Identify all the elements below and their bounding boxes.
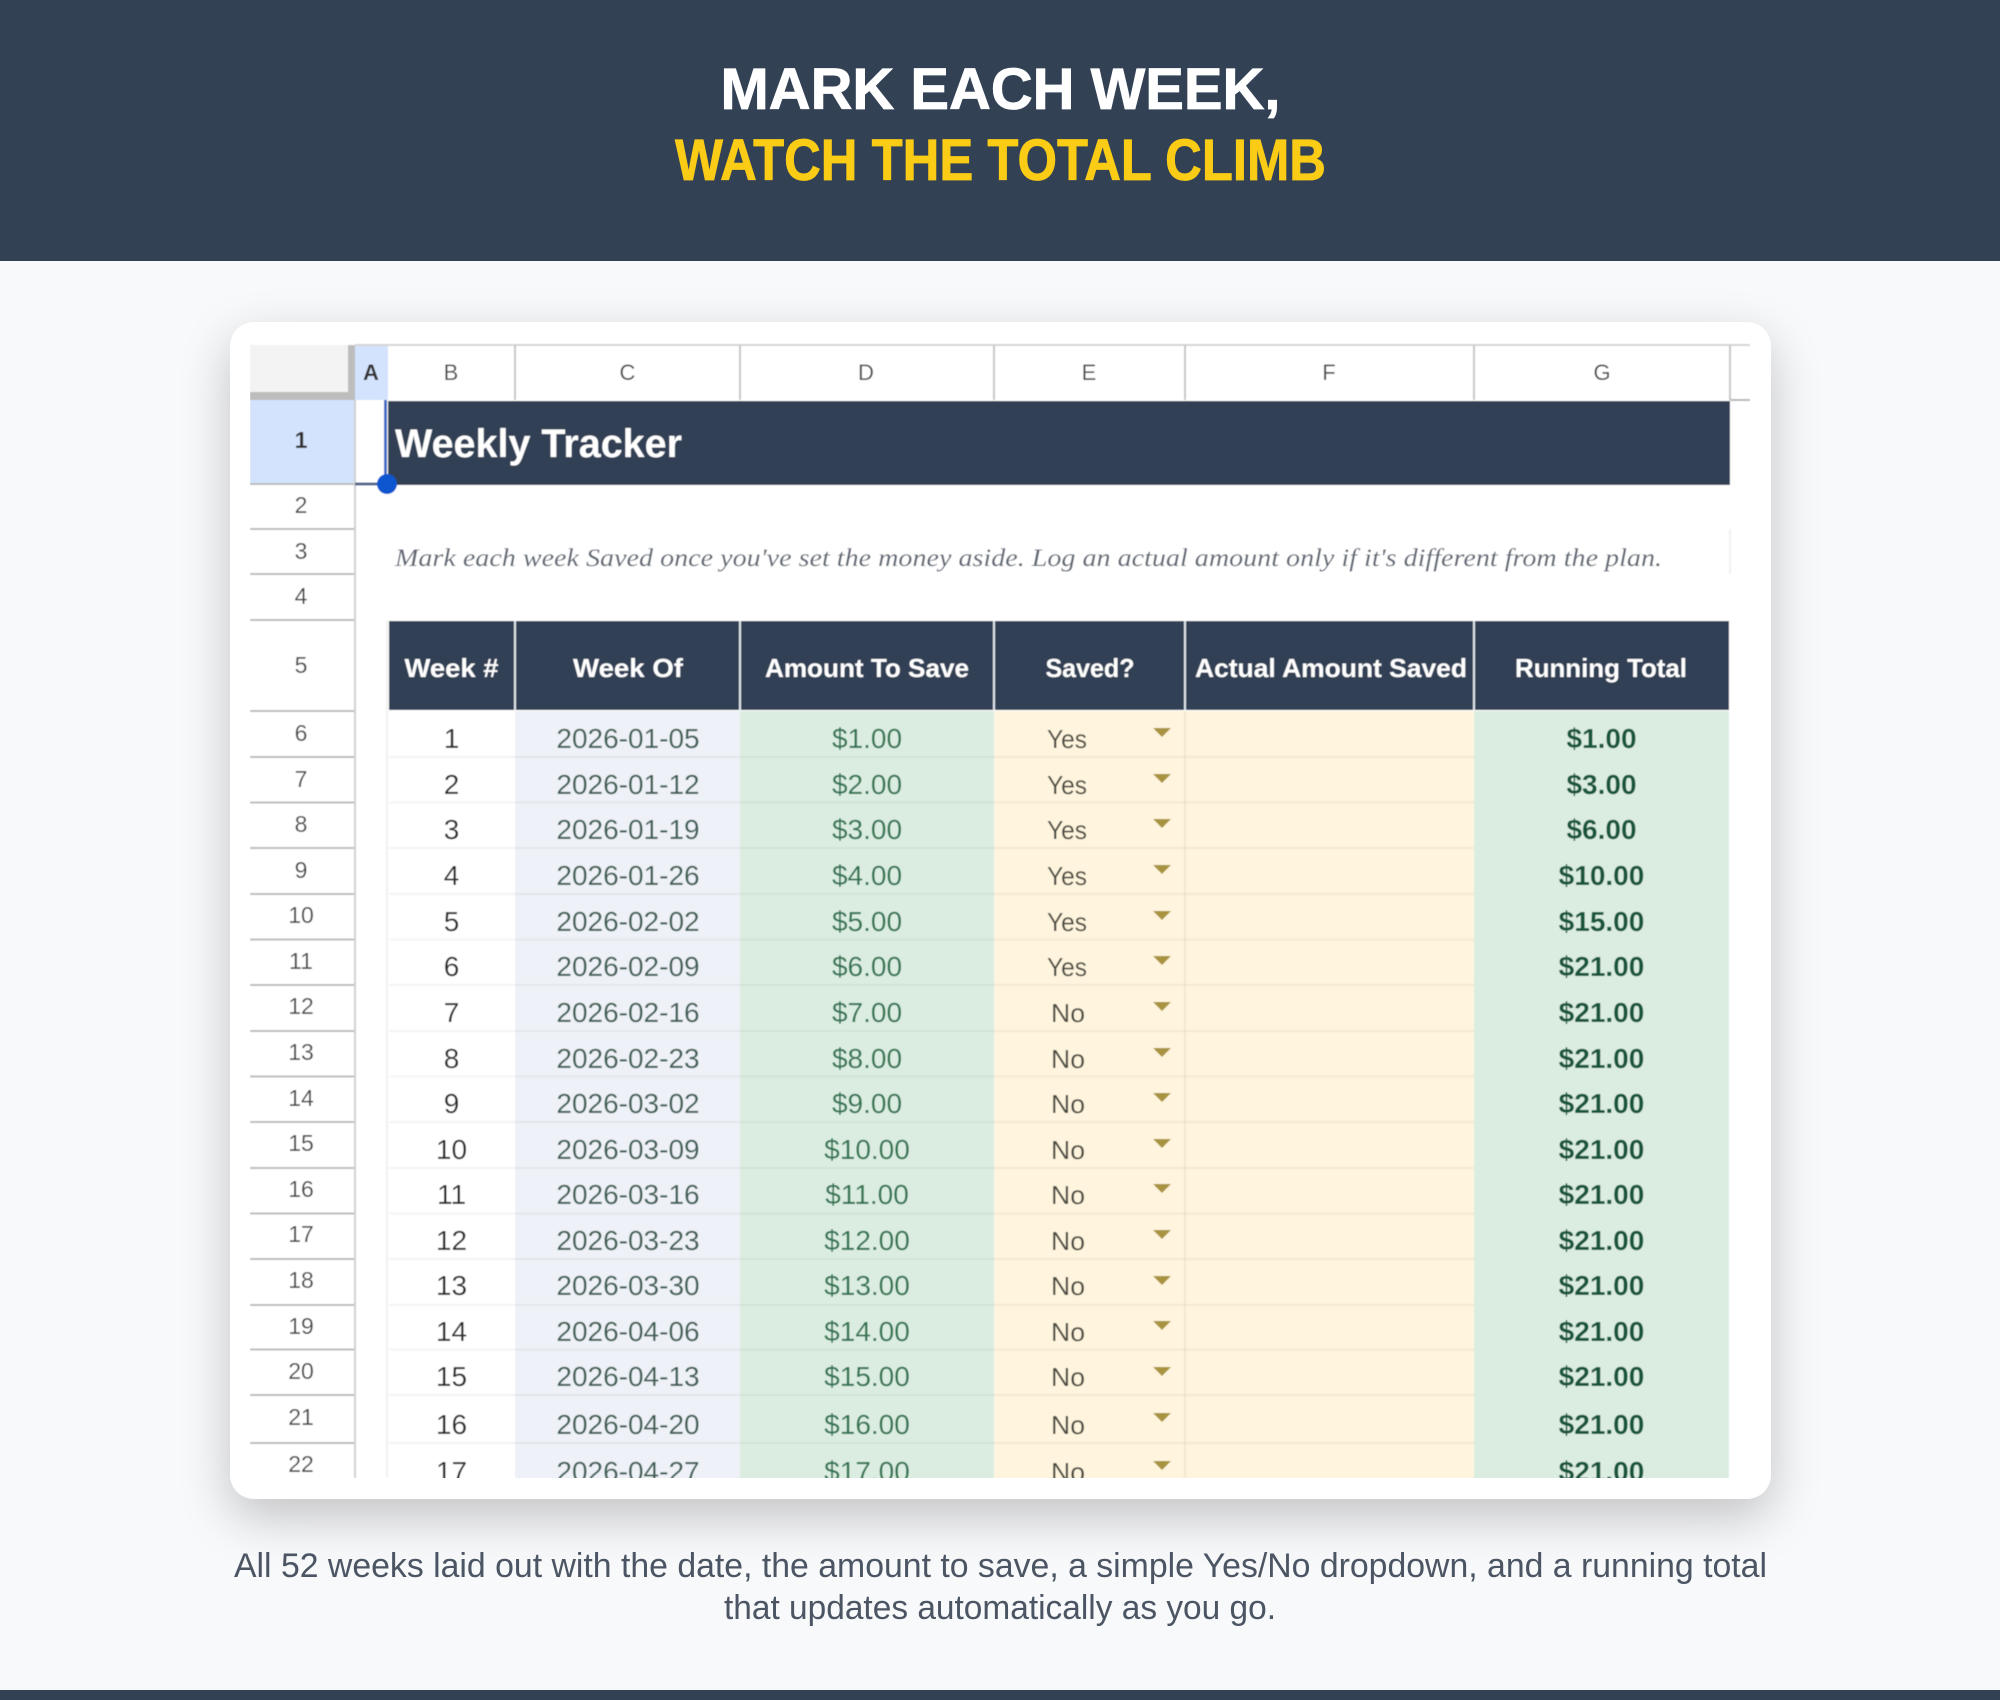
row header column: 21	[288, 1404, 314, 1430]
row: week 4	[444, 864, 1644, 888]
row: week 8: $21.00	[1559, 1043, 1644, 1074]
row header column: 16	[288, 1176, 314, 1202]
row: week 14: No	[1051, 1317, 1085, 1347]
row header column: 1	[295, 427, 308, 453]
row: week 6: $6.00	[832, 951, 902, 982]
row header column: 17	[288, 1221, 314, 1247]
row: week 14: 14	[436, 1316, 467, 1347]
row: week 5: 2026-02-02	[556, 906, 700, 937]
row: week 12: $12.00	[824, 1225, 910, 1256]
row header column: 12	[288, 993, 314, 1019]
row: week 1: Yes	[1047, 724, 1087, 754]
row: week 17: 2026-04-27	[556, 1456, 700, 1487]
row: week 8: $8.00	[832, 1043, 902, 1074]
row header column: 8	[295, 811, 307, 837]
row: week 9: $21.00	[1559, 1088, 1644, 1119]
column header row: A	[363, 360, 379, 385]
row: week 12: No	[1051, 1226, 1085, 1256]
row: week 11	[438, 1182, 1644, 1206]
row: week 12: $21.00	[1559, 1225, 1644, 1256]
weekly tracker title bar: Weekly Tracker	[395, 422, 682, 466]
row: week 4: Yes	[1047, 861, 1087, 891]
row header column: 5	[295, 652, 307, 678]
column fills	[515, 711, 1729, 1481]
column header row: C	[620, 360, 636, 385]
row: week 17: 17	[436, 1456, 467, 1487]
row: week 16: $16.00	[824, 1409, 910, 1440]
selected cell handle	[355, 400, 397, 494]
row: week 6: $21.00	[1559, 951, 1644, 982]
row: week 13: 13	[436, 1270, 467, 1301]
row: week 13: $13.00	[824, 1270, 910, 1301]
row: week 9: $9.00	[832, 1088, 902, 1119]
table header row	[389, 621, 1729, 710]
row header column: 20	[288, 1358, 314, 1384]
row: week 10	[437, 1138, 1644, 1162]
row: week 10: 10	[436, 1134, 467, 1165]
title: WATCH THE TOTAL CLIMB	[675, 128, 1326, 193]
caption: that updates automatically as you go.	[724, 1589, 1276, 1627]
caption	[234, 1547, 1767, 1627]
row: week 5: $5.00	[832, 906, 902, 937]
row: week 13: $21.00	[1559, 1270, 1644, 1301]
row: week 3: 3	[444, 814, 459, 845]
row: week 3	[444, 818, 1636, 842]
row: week 17	[438, 1460, 1644, 1478]
row: week 6	[444, 954, 1644, 978]
row: week 8: No	[1051, 1044, 1085, 1074]
row: week 15: $21.00	[1559, 1361, 1644, 1392]
table header row: Week Of	[573, 653, 683, 683]
row: week 14: $14.00	[824, 1316, 910, 1347]
footer band	[0, 1690, 2000, 1700]
row: week 12: 12	[436, 1225, 467, 1256]
row: week 16: 2026-04-20	[556, 1409, 700, 1440]
table header row: Saved?	[1046, 653, 1134, 683]
row header column: 3	[295, 538, 307, 564]
caption: All 52 weeks laid out with the date, the amount to save, a simple Yes/No dropdown, and a running total	[234, 1547, 1767, 1585]
row: week 15: 2026-04-13	[556, 1361, 700, 1392]
row: week 2: 2	[444, 769, 459, 800]
row: week 16: No	[1051, 1410, 1085, 1440]
row: week 6: 6	[444, 951, 459, 982]
row: week 13: 2026-03-30	[556, 1270, 700, 1301]
row: week 1: 1	[444, 723, 459, 754]
row: week 13	[437, 1274, 1644, 1298]
row: week 15: No	[1051, 1362, 1085, 1392]
title	[675, 57, 1326, 193]
row: week 8: 8	[444, 1043, 459, 1074]
row header column: 11	[289, 948, 313, 974]
row: week 5	[444, 910, 1644, 934]
row header column	[250, 400, 355, 1478]
row: week 16: $21.00	[1559, 1409, 1644, 1440]
row: week 4: $10.00	[1559, 860, 1644, 891]
table header row: Week #	[404, 653, 499, 683]
row: week 8: 2026-02-23	[556, 1043, 700, 1074]
row: week 1: $1.00	[1566, 723, 1637, 754]
column header row: G	[1593, 360, 1611, 385]
row header column: 18	[288, 1267, 314, 1293]
row: week 16: 16	[436, 1409, 467, 1440]
row: week 5: Yes	[1047, 907, 1087, 937]
column header row: E	[1082, 360, 1096, 385]
row: week 7: $7.00	[832, 997, 902, 1028]
row: week 9	[444, 1092, 1644, 1116]
row: week 3: $3.00	[832, 814, 902, 845]
row: week 9: No	[1051, 1089, 1085, 1119]
row header column: 14	[288, 1085, 314, 1111]
row header column: 4	[295, 583, 308, 609]
table header row: Actual Amount Saved	[1195, 653, 1467, 683]
row: week 15: $15.00	[824, 1361, 910, 1392]
row: week 2: $2.00	[832, 769, 902, 800]
row: week 10: $21.00	[1559, 1134, 1644, 1165]
row: week 3: Yes	[1047, 815, 1087, 845]
row: week 2	[444, 772, 1636, 796]
row: week 14: 2026-04-06	[556, 1316, 700, 1347]
row: week 11: 2026-03-16	[556, 1179, 700, 1210]
column header row: D	[858, 360, 874, 385]
row header column: 15	[288, 1130, 314, 1156]
row: week 2: 2026-01-12	[556, 769, 700, 800]
row: week 14	[437, 1320, 1644, 1344]
row: week 2: Yes	[1047, 770, 1087, 800]
corner cell	[250, 345, 355, 400]
row: week 1: 2026-01-05	[556, 723, 700, 754]
grid lines	[389, 757, 1474, 1443]
row: week 14: $21.00	[1559, 1316, 1644, 1347]
row: week 15	[437, 1364, 1644, 1388]
row header column: 9	[295, 857, 307, 883]
row: week 3: $6.00	[1566, 814, 1637, 845]
row: week 12	[437, 1228, 1644, 1252]
row: week 7: 7	[444, 997, 459, 1028]
row: week 10: $10.00	[824, 1134, 910, 1165]
table header row: Running Total	[1515, 653, 1687, 683]
row: week 7: 2026-02-16	[556, 997, 700, 1028]
weekly tracker title bar	[388, 401, 1730, 485]
row header column: 2	[295, 492, 307, 518]
row header column: 22	[288, 1451, 314, 1477]
row: week 17: No	[1051, 1457, 1085, 1487]
row: week 9: 9	[444, 1088, 459, 1119]
row: week 12: 2026-03-23	[556, 1225, 700, 1256]
table header row: Amount To Save	[765, 653, 969, 683]
row: week 17: $17.00	[824, 1456, 910, 1487]
card panel	[230, 322, 1771, 1499]
row: week 4: 4	[444, 860, 459, 891]
row: week 5: $15.00	[1559, 906, 1644, 937]
row: week 17: $21.00	[1559, 1456, 1644, 1487]
header band	[0, 0, 2000, 261]
row: week 4: $4.00	[832, 860, 902, 891]
row: week 3: 2026-01-19	[556, 814, 700, 845]
row: week 11: 11	[437, 1179, 466, 1210]
row header column: 7	[295, 766, 307, 792]
row: week 4: 2026-01-26	[556, 860, 700, 891]
row: week 10: No	[1051, 1135, 1085, 1165]
row: week 11: $11.00	[825, 1179, 909, 1210]
row: week 5: 5	[444, 906, 459, 937]
row: week 8	[444, 1046, 1644, 1070]
title: MARK EACH WEEK,	[720, 57, 1280, 122]
row: week 15: 15	[436, 1361, 467, 1392]
row: week 1	[445, 726, 1636, 750]
row: week 13: No	[1051, 1271, 1085, 1301]
row: week 11: No	[1051, 1180, 1085, 1210]
row: week 2: $3.00	[1566, 769, 1637, 800]
instruction note: Mark each week Saved once you've set the money aside. Log an actual amount only if it's different from the plan.	[394, 545, 1662, 572]
spreadsheet screenshot	[250, 340, 1752, 1487]
column header row: B	[444, 360, 458, 385]
row: week 6: Yes	[1047, 952, 1087, 982]
row: week 16	[437, 1412, 1644, 1436]
row: week 7: $21.00	[1559, 997, 1644, 1028]
row: week 9: 2026-03-02	[556, 1088, 700, 1119]
row header column: 19	[288, 1313, 314, 1339]
row: week 7	[444, 1000, 1644, 1024]
column header row: F	[1322, 360, 1336, 385]
row: week 10: 2026-03-09	[556, 1134, 700, 1165]
row header column: 10	[288, 902, 314, 928]
row: week 1: $1.00	[832, 723, 902, 754]
row: week 11: $21.00	[1559, 1179, 1644, 1210]
row: week 7: No	[1051, 998, 1085, 1028]
row header column: 13	[288, 1039, 314, 1065]
column header row	[355, 345, 1750, 400]
row header column: 6	[295, 720, 307, 746]
row: week 6: 2026-02-09	[556, 951, 700, 982]
